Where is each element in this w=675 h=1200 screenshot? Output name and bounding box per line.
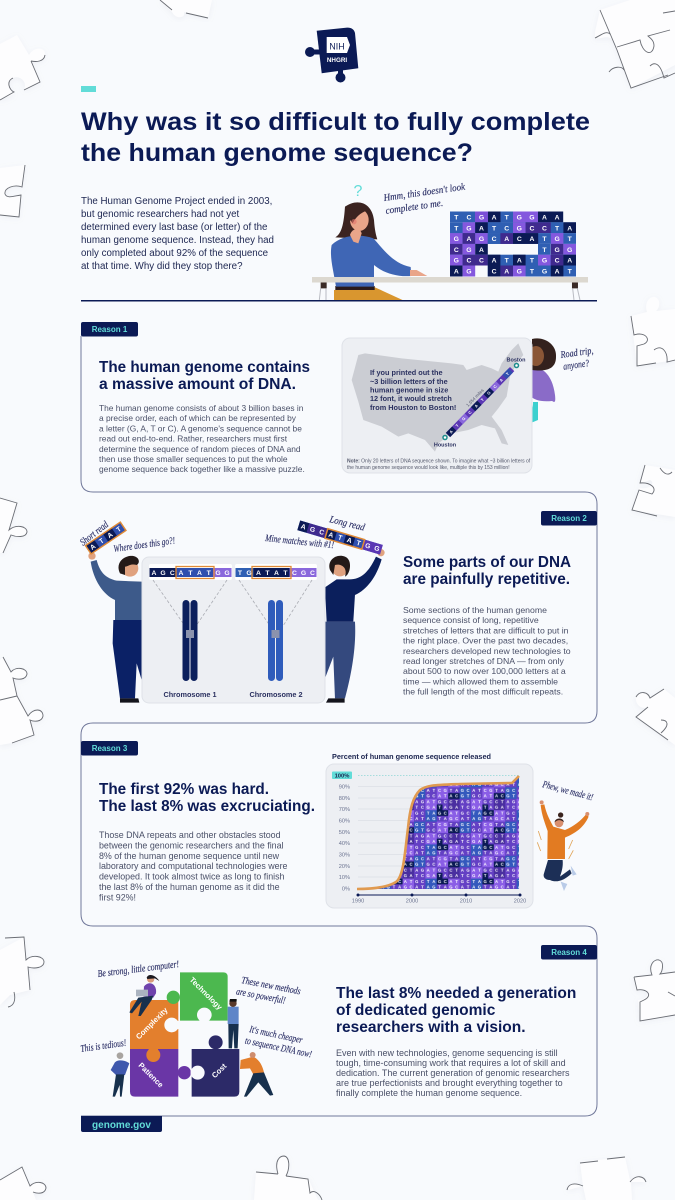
reason 2 body: stretches of letters that are difficult to put in (403, 625, 569, 635)
panel: US map card (342, 338, 532, 473)
title (81, 108, 590, 167)
DNA letter grid with gaps (450, 212, 576, 276)
reason 2 body: researchers developed new technologies to (403, 646, 571, 656)
chart title: Percent of human genome sequence released (332, 752, 491, 761)
puzzle piece: patience (130, 1048, 191, 1097)
speech: doesn't look complete: complete to me. (385, 198, 444, 217)
chromosome 2 (268, 600, 283, 681)
right researcher (325, 549, 385, 703)
reason 2 tag: Reason 2 (551, 514, 587, 523)
y axis labels: 90% (339, 784, 350, 790)
reason 4 heading: researchers with a vision. (336, 1019, 526, 1036)
reason 1 body: a letter (G, A, T or C). A genome's sequence cannot be (99, 423, 302, 433)
map statement: human genome in size (370, 386, 448, 394)
chromosome labels: Chromosome 1 (163, 690, 217, 699)
speech: road trip: Road trip, (559, 345, 594, 361)
reason 3 body: laboratory and computational technologies were (99, 861, 288, 871)
y axis labels: 30% (339, 852, 350, 858)
map statement: If you printed out the (370, 368, 443, 377)
y axis labels: 10% (339, 875, 350, 881)
question mark: ? (354, 183, 363, 200)
left researcher (88, 552, 143, 703)
reason 1 body: a precise order, each of which can be represented by (99, 413, 297, 423)
DNA letter grid with gaps: TGATCGCCTA (454, 225, 572, 232)
strip: chromosome 1 sequence: AGCATATGG (152, 570, 230, 577)
puzzle piece: patience: Patience (137, 1061, 165, 1089)
y axis labels: 40% (339, 841, 350, 847)
map of the United States (352, 343, 523, 452)
chromosome 1 (182, 600, 198, 681)
desk (312, 277, 588, 282)
zoom guide lines (153, 580, 312, 626)
panel: reason 4 (80, 945, 597, 1098)
puzzle illustration (111, 972, 273, 1097)
speech: cheaper: to sequence DNA now! (244, 1035, 313, 1060)
reason 4 body: tough, time-consuming work that requires a lot of skill and (336, 1058, 566, 1068)
x axis: 2010 (460, 898, 472, 904)
panel: reason 2 (78, 511, 597, 703)
illustration: researcher at desk with incomplete DNA grid (312, 182, 588, 300)
reason 3 body: between the genomic researchers and the final (99, 840, 284, 850)
y axis labels (339, 784, 350, 892)
illustration: jumping woman (537, 800, 589, 891)
speech: new methods: These new methods (240, 975, 301, 997)
reason 3 body: developed. It took almost twice as long to finish (99, 872, 285, 882)
puzzle piece: cost: Cost (210, 1061, 229, 1080)
speech: we made it: Phew, we made it! (541, 779, 594, 803)
reason 4 body: dedication. The current generation of genomic researchers (336, 1068, 570, 1078)
map statement: ~3 billion letters of the (370, 377, 448, 386)
y axis labels: 20% (339, 864, 350, 870)
strip: chromosome 2 sequence (235, 564, 317, 580)
100 percent callout (332, 772, 352, 780)
map statement: 12 font, it would stretch (370, 394, 452, 403)
intro paragraph: only completed about 92% of the sequence (81, 248, 268, 259)
speech: where does this go: Where does this go?! (113, 535, 176, 555)
reason 1 body: The human genome consists of about 3 billion bases in (99, 403, 304, 413)
puzzle piece: technology: Technology (188, 975, 225, 1012)
speech: road trip: anyone? (563, 358, 590, 373)
logo: NIH NHGRI puzzle piece: NIH (329, 42, 345, 52)
Boston marker: Boston (507, 358, 526, 364)
intro paragraph: determined every last base (or letter) of the (81, 222, 267, 233)
reason 1 body: determine the sequence of random pieces of DNA and (99, 444, 301, 454)
reason 3 heading: The last 8% was excruciating. (99, 798, 315, 815)
logo: NIH NHGRI puzzle piece: NHGRI (327, 57, 347, 64)
reason 1 heading (99, 359, 310, 393)
label: short read: Short read (78, 519, 111, 548)
snake outline joining the reason panels (81, 336, 597, 1116)
reason 2 body: Some sections of the human genome (403, 605, 547, 615)
speech: cheaper: It's much cheaper (248, 1024, 304, 1046)
100 percent callout: 100% (335, 774, 349, 780)
intro paragraph: human genome sequence. Instead, they had (81, 235, 274, 246)
reason 4 body: Even with new technologies, genome sequencing is still (336, 1048, 558, 1058)
puzzle piece: complexity: Complexity (134, 1005, 170, 1041)
logo: NIH NHGRI puzzle piece (305, 28, 358, 82)
reason 2 heading (403, 554, 571, 588)
reason 3 body: 8% of the human genome sequence until new (99, 851, 280, 861)
label: long read: Long read (327, 514, 367, 534)
intro paragraph: but genomic researchers had not yet (81, 209, 240, 220)
reason 1 tag: Reason 1 (92, 325, 128, 334)
puzzle piece: cost (191, 1035, 239, 1097)
puzzle piece: complexity (130, 1000, 179, 1049)
speech: doesn't look complete: Hmm, this doesn't look (382, 182, 466, 204)
reason 3 tag: Reason 3 (92, 744, 128, 753)
speech: cheaper (244, 1024, 315, 1060)
reason 4 heading: of dedicated genomic (336, 1002, 496, 1019)
DNA letter grid with gaps: GAGCACATGT (454, 236, 573, 243)
speech: be strong: Be strong, little computer! (97, 959, 180, 980)
accent bar (81, 86, 96, 92)
reason 3 tag (81, 741, 138, 756)
Houston marker: Houston (434, 442, 457, 448)
reason 4 heading: The last 8% needed a generation (336, 985, 576, 1002)
reason 3 body: Those DNA repeats and other obstacles stood (99, 830, 281, 840)
DNA letter grid with gaps: CGATGG (454, 247, 572, 254)
speech: new methods: are so powerful! (235, 986, 286, 1007)
y axis labels: 80% (339, 796, 350, 802)
reason 2 tag (541, 511, 597, 526)
reason 3 heading: The first 92% was hard. (99, 781, 269, 798)
speech: tedious: This is tedious! (80, 1038, 127, 1055)
Boston marker (507, 358, 526, 368)
DNA strip from Houston to Boston: ATGCATGCAT (448, 371, 510, 435)
reason 3 heading (99, 781, 315, 815)
y axis labels: 60% (339, 818, 350, 824)
reason 1 body: genome sequence back together like a massive puzzle. (99, 464, 305, 474)
Houston marker (434, 436, 457, 448)
speech: new methods (235, 975, 301, 1009)
reason 2 body: read longer stretches of DNA — from only (403, 656, 564, 666)
reason 2 body: time — which allowed them to assemble (403, 676, 558, 686)
DNA letter grid with gaps: TCGATGGAA (454, 214, 560, 222)
y axis labels: 70% (339, 807, 350, 813)
intro paragraph: The Human Genome Project ended in 2003, (81, 196, 272, 207)
figure: seated woman with laptop (129, 975, 159, 1016)
reason 4 body: are true perfectionists and brought everything together to (336, 1078, 563, 1088)
figure: grey-haired woman (111, 1052, 129, 1097)
puzzle piece: technology (167, 972, 228, 1022)
short read strip (85, 522, 126, 554)
divider rule (81, 300, 597, 302)
reason 4 tag (541, 945, 597, 960)
reason 2 body: the right place. Over the past two decades, (403, 636, 568, 646)
figure: man pushing (240, 1052, 273, 1097)
speech: doesn't look complete (382, 182, 468, 217)
panel: reason 3 (81, 741, 594, 908)
reason 2 body: the full length of the most difficult repeats. (403, 687, 563, 697)
panel: reason 1 (81, 322, 596, 474)
speech: road trip (559, 345, 596, 373)
reason 4 tag: Reason 4 (551, 948, 587, 957)
illustration: woman peeking behind map (526, 338, 556, 425)
map note: the human genome sequence would look like, multiple this by 153 million! (347, 465, 510, 471)
reason 2 heading: are painfully repetitive. (403, 571, 570, 588)
reason 2 heading: Some parts of our DNA (403, 554, 571, 571)
reason 1 body: then use those smaller sequences to put the whole (99, 454, 288, 464)
area chart: percent released (326, 764, 533, 908)
DNA letter grid with gaps: AGCAGTGAT (454, 268, 573, 276)
reason 1 heading: The human genome contains (99, 359, 310, 376)
reason 1 body: read out end-to-end. Rather, researchers must first (99, 434, 288, 444)
y axis labels: 50% (339, 830, 350, 836)
reason 1 tag (81, 322, 138, 336)
map note: Note: Only 20 letters of DNA sequence shown. To imagine what ~3 billion letters of (347, 458, 530, 464)
title: Why was it so difficult to fully complete (81, 108, 590, 136)
map statement: from Houston to Boston! (370, 403, 456, 412)
chromosome labels: Chromosome 2 (249, 690, 303, 699)
x axis: 2000 (406, 898, 418, 904)
intro paragraph: at that time. Why did they stop there? (81, 261, 243, 272)
figure: standing man (228, 999, 239, 1048)
reason 2 body: about 500 to now over 100,000 letters at a (403, 666, 566, 676)
x axis: 1990 (352, 898, 364, 904)
reason 2 body: sequence consist of long, repetitive (403, 615, 539, 625)
long read strip: AGCATATGG (300, 523, 380, 553)
DNA letter grid with gaps: GCCATATGCA (454, 258, 572, 265)
footer tag: genome.gov (81, 1116, 162, 1132)
title: the human genome sequence? (81, 139, 473, 167)
speech: mine matches: Mine matches with #1! (264, 533, 334, 551)
x axis: 2020 (514, 898, 526, 904)
y axis labels: 0% (342, 886, 350, 892)
distance label: 1,654 miles (465, 387, 485, 408)
reason 3 body: the last 8% of the human genome as it did the (99, 882, 280, 892)
short read strip: ATAT (89, 525, 124, 552)
footer tag: genome.gov: genome.gov (92, 1120, 151, 1131)
panel: chromosome card (142, 557, 325, 703)
x axis (352, 894, 526, 904)
strip: chromosome 2 sequence: TGATATCGC (238, 570, 315, 577)
reason 4 body: finally complete the human genome sequence. (336, 1088, 522, 1098)
reason 1 heading: a massive amount of DNA. (99, 376, 296, 393)
strip: chromosome 1 sequence (149, 564, 232, 580)
reason 3 body: first 92%! (99, 892, 136, 902)
